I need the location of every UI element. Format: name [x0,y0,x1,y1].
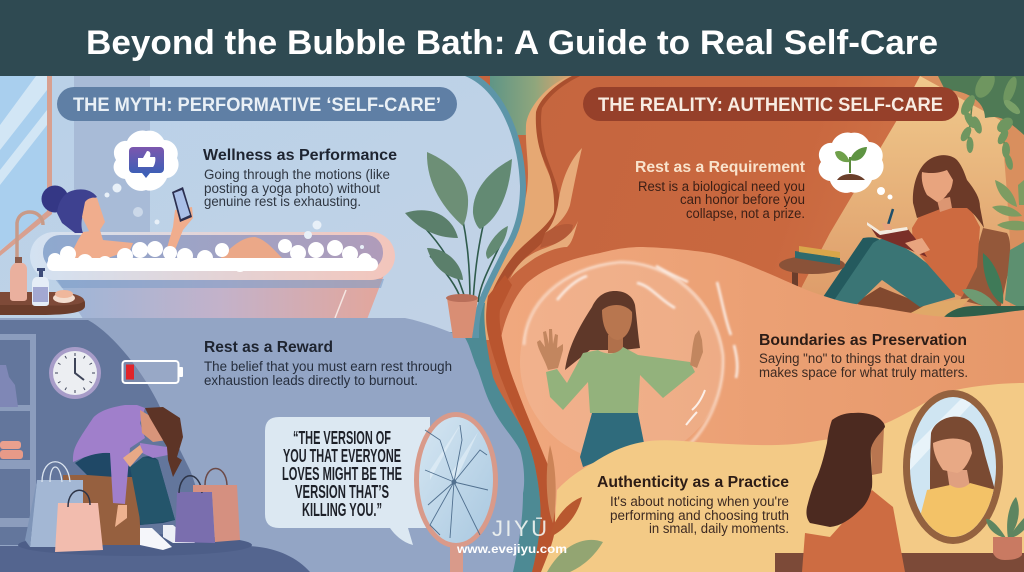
watermark: www.evejiyu.com [456,544,567,556]
rust ribbon upper [492,76,580,296]
text: rest as a requirement: collapse, not a prize. [686,206,805,221]
text: authenticity as a practice: performing and choosing truth [610,508,789,523]
panel: myth heading [57,87,457,121]
peach ribbon [480,76,570,340]
text: rest as a reward: The belief that you must earn rest through [204,359,452,374]
text: wellness as performance: Wellness as Performance [203,147,397,164]
callout: quote: KILLING YOU.” [302,500,382,520]
panel: reality heading [583,87,959,121]
text: authenticity as a practice: in small, daily moments. [649,521,789,536]
text: authenticity as a practice: It's about noticing when you're [610,494,789,509]
callout: quote: YOU THAT EVERYONE [283,446,401,466]
text: boundaries as preservation: Boundaries as Preservation [759,332,967,349]
light beam [795,76,1024,320]
text: rest as a requirement: Rest is a biological need you [638,179,805,194]
vines [938,69,1024,171]
icon: toiletries on side table [0,212,85,315]
mirror with reflection [903,390,1003,544]
icon: cracked mirror [414,412,498,572]
woman from behind [802,413,905,572]
text: boundaries as preservation: Saying "no" to things that drain you [759,351,965,366]
text: rest as a reward [204,339,452,388]
callout: quote: LOVES MIGHT BE THE [282,464,402,484]
text: wellness as performance: posting a yoga photo) without [204,181,380,196]
right background [470,76,1024,572]
teal ribbon lower [465,300,541,572]
panel: bathtub [30,232,395,322]
icon: plant [405,152,512,338]
small potted plant [986,497,1024,560]
text: boundaries as preservation: makes space for what truly matters. [759,365,968,380]
panel: myth top [0,76,520,332]
text: authenticity as a practice [597,474,789,536]
text: rest as a reward: Rest as a Reward [204,339,333,356]
middle band [500,247,1024,572]
bathroom wall column [74,76,150,256]
bather [42,186,288,264]
floor [0,546,310,572]
side table with books [779,246,845,290]
foliage [943,242,1024,320]
panel: myth heading: THE MYTH: PERFORMATIVE ‘SELF-CARE’ [73,95,441,116]
icon: thought bubble with thumbs up [114,131,179,191]
flame leaves [510,148,582,279]
table [775,553,1024,572]
callout: quote: “THE VERSION OF [293,428,391,448]
text: authenticity as a practice: Authenticity as a Practice [597,474,789,491]
text: rest as a requirement: can honor before you [680,192,805,207]
shelf [0,334,36,527]
text: wellness as performance: genuine rest is exhausting. [204,194,361,209]
room shadow [0,320,210,545]
rust ribbon lower [486,275,555,572]
side leaves [992,180,1024,230]
top colour blend [490,76,572,135]
title: Beyond the Bubble Bath: A Guide to Real Self-Care [86,24,938,62]
bubbles [104,184,364,249]
callout: quote: VERSION THAT’S [295,482,389,502]
arch of light [795,76,1010,310]
text: rest as a requirement [635,159,806,221]
watermark [456,516,567,556]
icon: thought bubble with sprout [819,133,892,200]
woman setting boundaries [537,291,703,467]
decorative plant [547,445,603,572]
icon: low battery [122,361,183,383]
text: rest as a requirement: Rest as a Requirement [635,159,806,176]
window [0,76,52,256]
foam [47,239,378,272]
text: wellness as performance: Going through the motions (like [204,167,390,182]
watermark: JIYŪ [492,516,547,541]
text: rest as a reward: exhaustion leads directly to burnout. [204,373,418,388]
panel: reality heading: THE REALITY: AUTHENTIC SELF-CARE [598,95,943,116]
text: wellness as performance [203,147,397,209]
text: boundaries as preservation [759,332,968,380]
personal boundary bubble [520,262,737,462]
bottom band [535,383,1024,572]
exhausted woman with shopping bags [18,405,252,556]
title [0,0,1024,76]
icon: clock [49,347,101,399]
woman reading on chair [823,155,1010,320]
callout: quote [265,417,430,545]
panel: myth bottom [0,318,524,572]
